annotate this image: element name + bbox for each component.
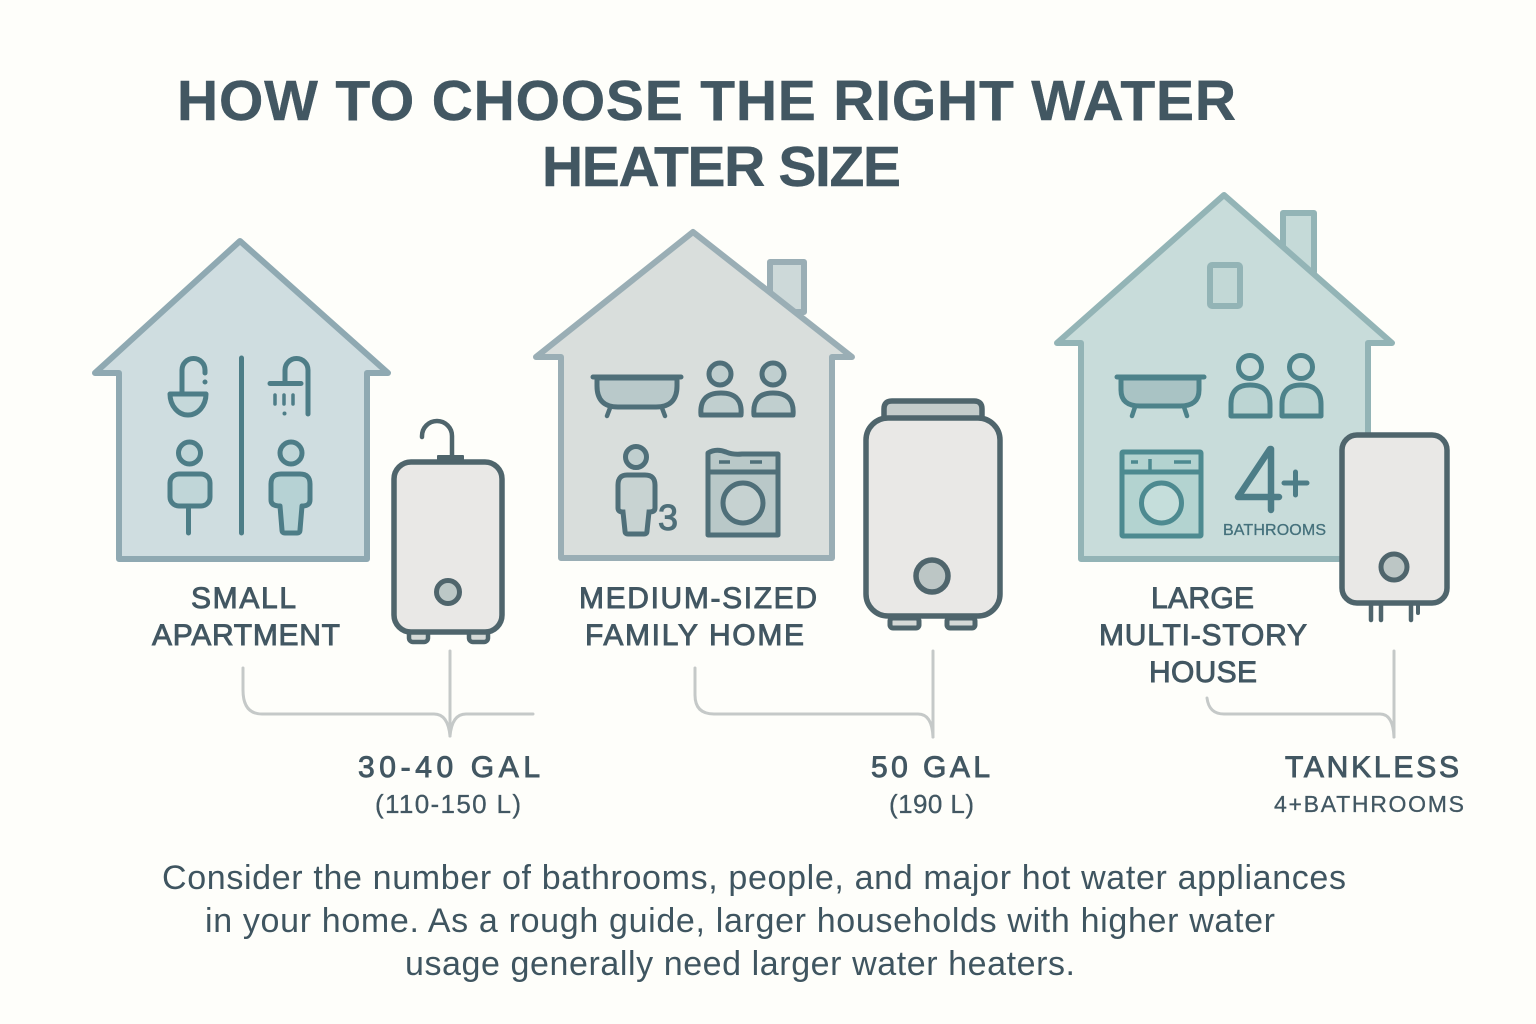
label: small apartment: APARTMENT [152, 619, 340, 652]
water heater: 50 gal [866, 401, 1000, 628]
title: HOW TO CHOOSE THE RIGHT WATER [177, 69, 1236, 133]
icon: person with 3 [618, 446, 678, 538]
bracket: medium home to 50 gal [695, 651, 933, 737]
house: medium family home [536, 232, 852, 558]
label: medium family home: MEDIUM-SIZED [579, 582, 817, 615]
icon: person left [170, 442, 210, 533]
icon: sink [170, 358, 206, 415]
description paragraph [162, 859, 1346, 983]
description paragraph: Consider the number of bathrooms, people, and major hot water appliances [162, 859, 1346, 897]
size: tankless [1274, 751, 1464, 817]
size: tankless: 4+BATHROOMS [1274, 791, 1464, 817]
panel: large multi-story house [1057, 195, 1392, 559]
size: 50 gal: 50 GAL [871, 751, 990, 784]
size: 30-40 gal: (110-150 L) [375, 789, 521, 819]
size: 30-40 gal [358, 751, 540, 819]
icon: washing machine [708, 450, 778, 535]
divider [239, 358, 244, 533]
label: large multi-story house [1099, 582, 1307, 689]
house: large multi-story [1057, 195, 1392, 559]
icon: person with 3: 3 [658, 497, 678, 538]
water heater: 30-40 gal [394, 421, 502, 642]
panel: medium family home [536, 232, 852, 558]
description paragraph: in your home. As a rough guide, larger households with higher water [205, 902, 1275, 940]
description paragraph: usage generally need larger water heaters. [405, 945, 1075, 983]
label: large multi-story house: MULTI-STORY [1099, 619, 1307, 652]
icon: shower [270, 358, 308, 414]
icon: bathtub [593, 377, 681, 416]
icon: bathtub [1117, 377, 1204, 416]
panel: small apartment [95, 241, 388, 559]
house: small apartment [95, 241, 388, 559]
icon: washing machine [1122, 452, 1201, 536]
label: small apartment: SMALL [191, 582, 296, 615]
label: medium family home: FAMILY HOME [585, 619, 804, 652]
bracket: large house to tankless [1207, 651, 1394, 737]
icon: two people [1231, 356, 1321, 416]
size: tankless: TANKLESS [1285, 751, 1459, 784]
text: 4+ bathrooms: BATHROOMS [1223, 522, 1326, 539]
size: 50 gal: (190 L) [889, 789, 974, 819]
label: large multi-story house: HOUSE [1149, 656, 1257, 689]
label: small apartment [152, 582, 340, 652]
icon: two people [701, 363, 793, 415]
water heater: tankless [1342, 435, 1447, 620]
label: large multi-story house: LARGE [1151, 582, 1254, 615]
title: HEATER SIZE [542, 135, 901, 199]
label: medium family home [579, 582, 817, 652]
size: 30-40 gal: 30-40 GAL [358, 751, 540, 784]
title [177, 69, 1236, 199]
bracket: small apartment to 30-40 gal [243, 651, 533, 736]
size: 50 gal [871, 751, 990, 819]
text: 4+ bathrooms [1223, 449, 1326, 539]
icon: person right [271, 442, 310, 533]
